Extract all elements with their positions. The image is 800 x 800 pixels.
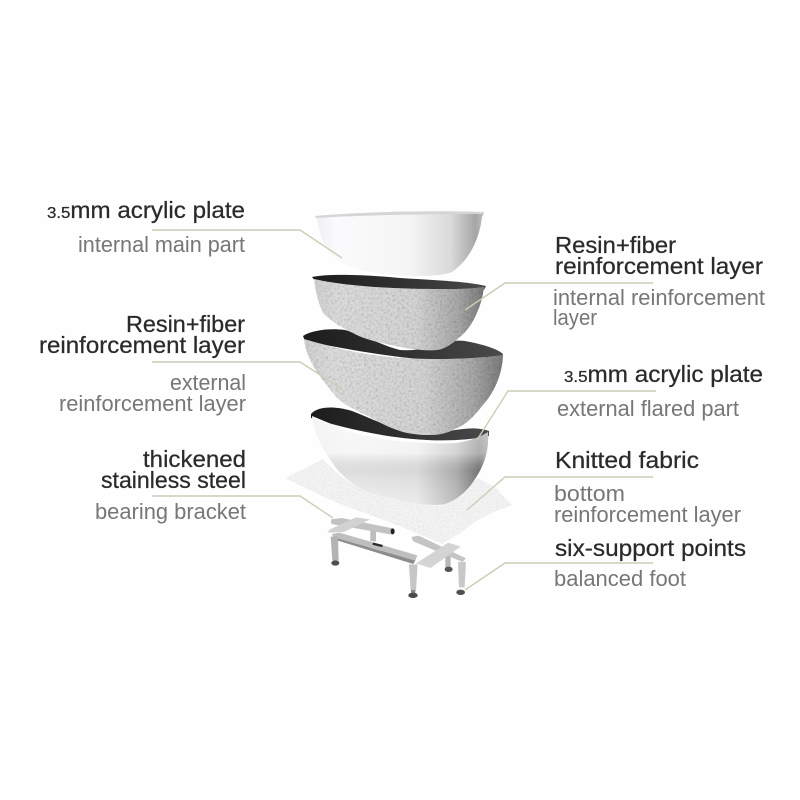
bowl 2: internal resin and fiber layer	[312, 275, 486, 350]
callout: internal acrylic plate: internal main part	[78, 232, 245, 257]
callout: internal reinforcement layer	[553, 232, 765, 330]
callout leader lines	[152, 230, 656, 590]
callout: internal reinforcement layer: layer	[553, 305, 597, 330]
callout: knitted fabric: reinforcement layer	[554, 502, 741, 527]
callout: external reinforcement layer	[39, 311, 246, 416]
callout: knitted fabric	[554, 447, 741, 527]
front legs	[331, 537, 466, 598]
callout: stainless steel bracket: bearing bracket	[95, 499, 246, 524]
callout: external acrylic plate: 3.5mm acrylic plate	[564, 361, 763, 387]
callout: internal acrylic plate	[47, 197, 245, 257]
bowl 1: internal acrylic main part	[315, 211, 484, 276]
callout: six-support points	[554, 535, 746, 591]
bowl 4: external flared acrylic	[311, 408, 489, 505]
callout: stainless steel bracket: thickened	[143, 446, 246, 472]
callout: external reinforcement layer: Resin+fiber	[126, 311, 245, 337]
callout: external acrylic plate	[557, 361, 763, 421]
callout: external acrylic plate: external flared part	[557, 396, 739, 421]
callout: six-support points: balanced foot	[554, 566, 686, 591]
exploded bathtub illustration	[285, 211, 512, 598]
callout: internal reinforcement layer: Resin+fiber	[555, 232, 676, 258]
callout: stainless steel bracket: stainless steel	[101, 467, 246, 493]
callout: six-support points: six-support points	[555, 535, 746, 561]
callout: internal acrylic plate: 3.5mm acrylic plate	[47, 197, 245, 223]
callout: external reinforcement layer: reinforcement layer	[59, 391, 246, 416]
callout: internal reinforcement layer: internal reinforcement	[553, 285, 765, 310]
callout: knitted fabric: Knitted fabric	[555, 447, 699, 473]
steel bearing bracket	[327, 517, 466, 598]
rear legs	[370, 526, 453, 572]
callout: internal reinforcement layer: reinforcement layer	[555, 253, 763, 279]
knitted fabric sheet	[285, 459, 512, 544]
callout: external reinforcement layer: external	[170, 370, 246, 395]
callout: knitted fabric: bottom	[554, 481, 625, 506]
frame top plates	[327, 517, 466, 568]
bowl 3: external resin and fiber layer	[303, 329, 503, 435]
callout: external reinforcement layer: reinforcement layer	[39, 332, 245, 358]
callout: stainless steel bracket	[95, 446, 246, 524]
